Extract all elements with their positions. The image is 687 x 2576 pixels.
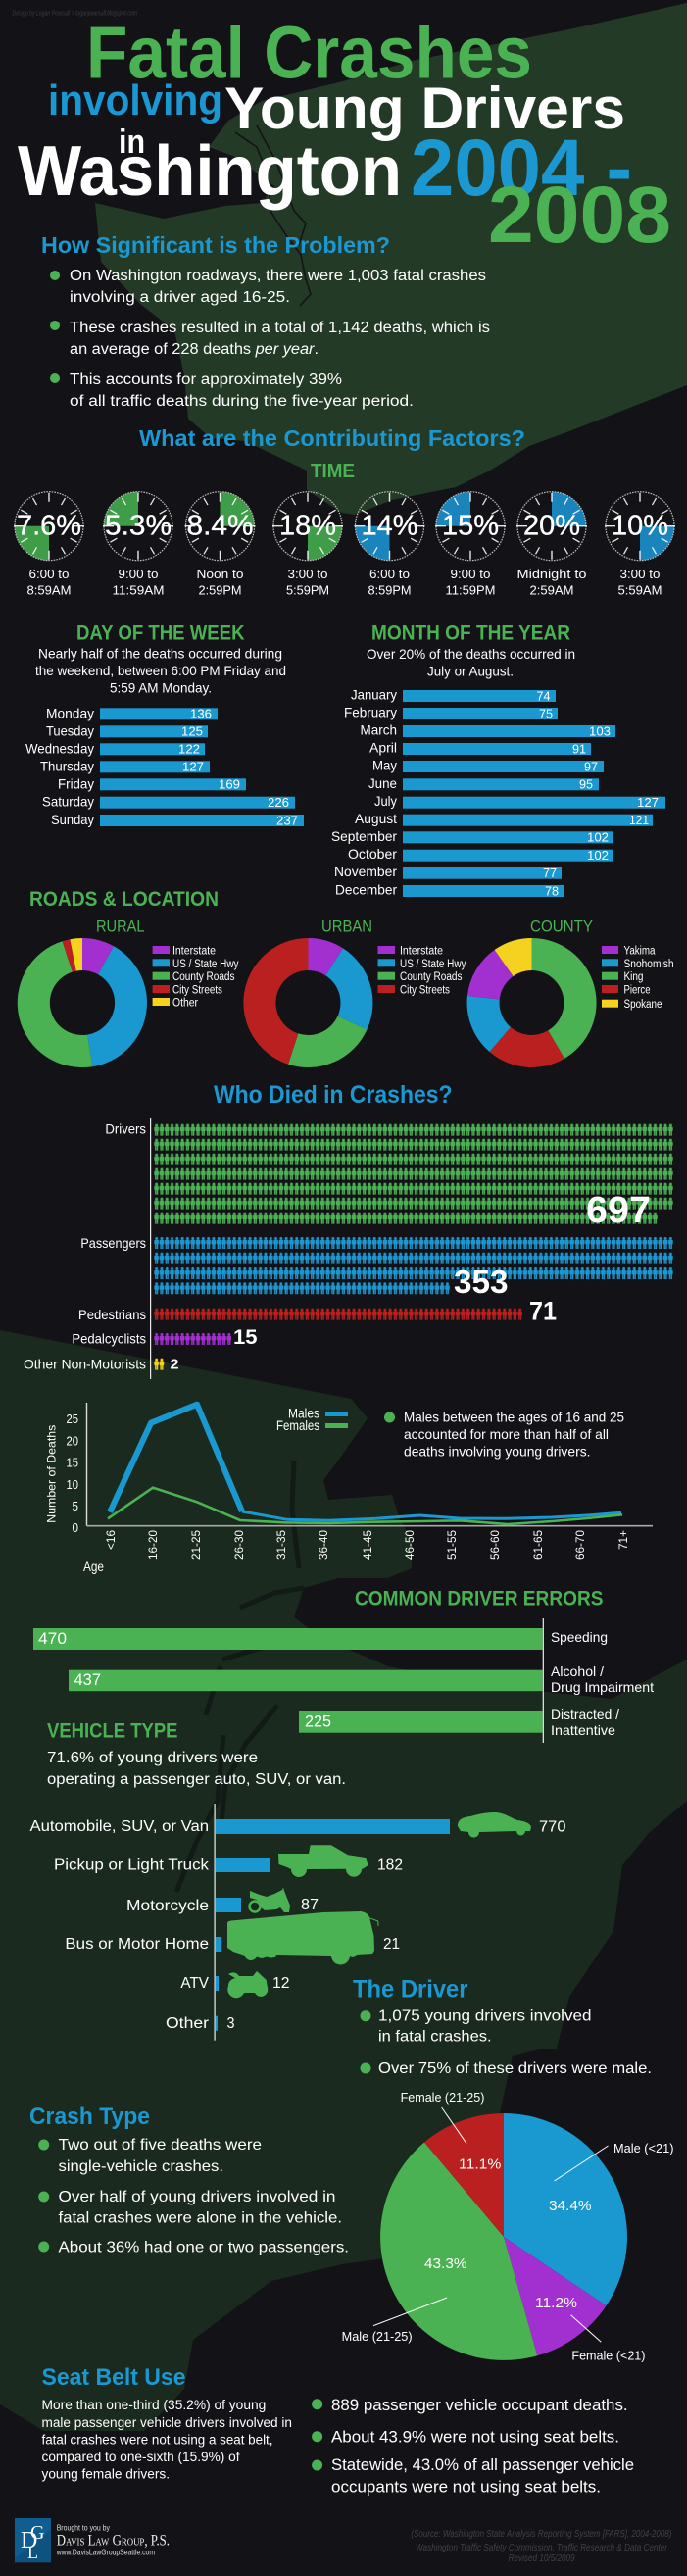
- bar chart: vehicle type: Pickup or Light Truck: [54, 1858, 209, 1874]
- bar chart: month: 77: [543, 867, 557, 880]
- line chart: deaths by age: 71+: [616, 1530, 630, 1550]
- bar chart: month: December: [335, 882, 397, 898]
- clock labels: 2:59AM: [529, 583, 574, 598]
- clock labels: 3:00 to: [619, 567, 661, 581]
- clock 6pm: [355, 492, 425, 561]
- legend: county: Spokane: [623, 999, 662, 1011]
- clock 3am: 10%: [612, 511, 668, 542]
- bullet list: significance: On Washington roadways, there were 1,003 fatal crashes: [70, 268, 486, 284]
- bar chart: driver errors: Alcohol /: [551, 1663, 604, 1679]
- source note: Revised 10/5/2009: [509, 2552, 575, 2564]
- bar chart: month: 95: [579, 778, 593, 792]
- icon: bus: [227, 1911, 378, 1964]
- line chart: deaths by age: [45, 1403, 653, 1574]
- clock labels: 11:59PM: [445, 583, 496, 598]
- line chart: deaths by age: 66-70: [573, 1530, 587, 1560]
- bar chart: vehicle type: 21: [383, 1936, 400, 1953]
- text: vehicle intro: 71.6% of young drivers were: [47, 1750, 258, 1766]
- pie chart: drivers by age and sex: 11.1%: [459, 2157, 502, 2173]
- line chart: deaths by age: Age: [83, 1559, 104, 1574]
- clock 3am: [605, 492, 675, 561]
- pedestrians row: 71: [529, 1297, 557, 1326]
- clock labels: 5:59PM: [286, 583, 329, 598]
- legend: rural: Other: [172, 998, 198, 1010]
- panel: day of the week: Nearly half of the deaths occurred during: [38, 646, 282, 662]
- panel: crash type: single-vehicle crashes.: [59, 2158, 223, 2175]
- heading: vehicle type: VEHICLE TYPE: [47, 1720, 178, 1743]
- line chart: deaths by age: 0: [73, 1521, 78, 1535]
- text: vehicle intro: [47, 1750, 346, 1788]
- bar chart: month: July: [374, 793, 397, 809]
- legend: rural: US / State Hwy: [172, 959, 239, 970]
- clock labels: 5:59AM: [617, 583, 662, 598]
- bar chart: month: 97: [584, 760, 598, 773]
- pie chart: drivers by age and sex: [342, 2091, 674, 2362]
- pictogram chart: who died: [24, 1118, 673, 1379]
- bar chart: month: August: [355, 811, 397, 826]
- bar chart: vehicle type: 87: [301, 1897, 319, 1913]
- bullets: seat belts: Statewide, 43.0% of all passenger vehicle: [331, 2455, 634, 2474]
- clock labels: 6:00 to: [29, 567, 69, 581]
- other non-motorists row: [154, 1357, 178, 1373]
- panel: day of the week: DAY OF THE WEEK: [76, 622, 245, 645]
- line chart: deaths by age: 61-65: [531, 1530, 545, 1560]
- line chart: deaths by age: 16-20: [146, 1530, 160, 1560]
- callout: males 16-25: Males between the ages of 16 and 25: [404, 1410, 624, 1425]
- line chart: deaths by age: <16: [104, 1530, 118, 1550]
- bar chart: vehicle type: ATV: [180, 1975, 210, 1992]
- title: in: [119, 124, 145, 161]
- bar chart: month: November: [334, 864, 397, 879]
- line chart: deaths by age: 26-30: [232, 1530, 246, 1560]
- panel: crash type: fatal crashes were alone in the vehicle.: [59, 2210, 342, 2227]
- clock labels: Midnight to: [517, 567, 586, 581]
- panel: the driver: in fatal crashes.: [378, 2029, 492, 2046]
- panel: county: [467, 917, 674, 1067]
- clock labels: 9:00 to: [118, 567, 159, 581]
- bar chart: month: May: [372, 757, 397, 772]
- map of Washington, top: [95, 3, 687, 515]
- chart legend: Males: [288, 1406, 319, 1421]
- callout: males 16-25: [384, 1410, 624, 1460]
- bar chart: vehicle type: Motorcycle: [126, 1898, 209, 1914]
- title: [18, 12, 671, 260]
- passengers row: 353: [454, 1263, 508, 1300]
- other non-motorists row: 2: [171, 1357, 178, 1373]
- map of Washington, lower: [0, 1330, 687, 2431]
- clock midnight: 20%: [523, 511, 580, 542]
- bar chart: vehicle type: 182: [377, 1858, 403, 1874]
- panel: seat belt use: male passenger vehicle drivers involved in: [41, 2415, 292, 2430]
- bar chart: month: June: [368, 775, 397, 791]
- pedestrians row: [154, 1297, 557, 1326]
- heading: contributing factors: What are the Contributing Factors?: [139, 425, 525, 451]
- title: Fatal Crashes: [86, 12, 532, 94]
- legend: urban: US / State Hwy: [400, 959, 466, 970]
- clock labels: Noon to: [196, 567, 243, 581]
- bar chart: driver errors: 225: [305, 1712, 331, 1731]
- panel: day of the week: 5:59 AM Monday.: [110, 680, 212, 696]
- line chart: deaths by age: 31-35: [274, 1530, 288, 1560]
- heading: who died: Who Died in Crashes?: [214, 1081, 453, 1109]
- clock labels: 6:00 to: [369, 567, 410, 581]
- bar chart: month: 78: [545, 884, 559, 898]
- bar chart: driver errors: Distracted /: [551, 1707, 619, 1722]
- panel: month of the year: Over 20% of the deaths occurred in: [367, 646, 575, 662]
- bullets: seat belts: occupants were not using seat belts.: [331, 2477, 601, 2496]
- legend: urban: [378, 945, 466, 996]
- pie chart: drivers by age and sex: Male (<21): [613, 2142, 674, 2155]
- pie chart: drivers by age and sex: Female (21-25): [401, 2091, 484, 2105]
- title: Young Drivers: [224, 75, 625, 141]
- panel: county: COUNTY: [530, 917, 593, 936]
- line chart: deaths by age: 20: [67, 1435, 78, 1449]
- source note: [411, 2528, 671, 2564]
- pictogram chart: who died: Pedestrians: [78, 1307, 146, 1322]
- clock labels: 8:59PM: [368, 583, 412, 598]
- chart legend: Females: [276, 1417, 319, 1433]
- line chart: deaths by age: 36-40: [317, 1530, 330, 1560]
- pie chart: drivers by age and sex: Male (21-25): [342, 2330, 413, 2344]
- bar chart: month: 74: [537, 689, 551, 703]
- legend: county: Pierce: [623, 984, 651, 996]
- panel: the driver: The Driver: [353, 1976, 468, 2004]
- bar chart: month: 121: [629, 814, 649, 827]
- heading: how significant: How Significant is the Problem?: [41, 232, 390, 258]
- bar chart: vehicle type: Automobile, SUV, or Van: [29, 1818, 209, 1835]
- bar chart: day of week: 122: [178, 743, 200, 757]
- clock 6am: [14, 492, 84, 561]
- legend: rural: [153, 945, 239, 1010]
- heading: common driver errors: COMMON DRIVER ERRORS: [355, 1587, 604, 1610]
- bar chart: month: April: [369, 739, 397, 755]
- clock labels: 9:00 to: [451, 567, 490, 581]
- males line: [110, 1405, 242, 1512]
- bar chart: month: February: [344, 704, 397, 719]
- bar chart: vehicle type: Bus or Motor Home: [65, 1936, 209, 1953]
- bullet list: significance: of all traffic deaths during the five-year period.: [70, 393, 414, 410]
- clock labels: [27, 567, 662, 598]
- callout: males 16-25: accounted for more than half of all: [404, 1426, 609, 1442]
- bar chart: day of week: Saturday: [42, 794, 94, 810]
- clock labels: 3:00 to: [288, 567, 327, 581]
- bar chart: vehicle type: 12: [272, 1975, 290, 1992]
- bar chart: day of week: 127: [182, 761, 204, 774]
- clock 6pm: 14%: [361, 511, 417, 542]
- panel: crash type: About 36% had one or two passengers.: [59, 2240, 349, 2256]
- line chart: deaths by age: 21-25: [189, 1530, 203, 1560]
- bar chart: month: 127: [637, 796, 659, 810]
- line chart: deaths by age: 10: [67, 1478, 78, 1492]
- title: 2004 -: [411, 124, 632, 213]
- bullets: seat belts: About 43.9% were not using seat belts.: [331, 2428, 619, 2447]
- clock 3pm: 18%: [279, 511, 336, 542]
- pictogram chart: who died: Drivers: [105, 1121, 146, 1137]
- icon: pickup truck: [278, 1845, 368, 1877]
- title: involving: [48, 76, 222, 124]
- donut: urban: [243, 938, 372, 1067]
- pedalcyclists row: [154, 1326, 258, 1349]
- heading: time: TIME: [311, 461, 355, 482]
- legend: county: Snohomish: [623, 959, 674, 970]
- clock 9am: 5.3%: [105, 511, 172, 542]
- bar chart: day of week: 237: [276, 814, 298, 827]
- line chart: deaths by age: 25: [67, 1412, 78, 1426]
- pie chart: drivers by age and sex: 34.4%: [549, 2199, 592, 2214]
- clock row: [14, 492, 675, 561]
- legend: rural: County Roads: [172, 971, 235, 983]
- pie chart: drivers by age and sex: 43.3%: [424, 2256, 467, 2272]
- panel: the driver: 1,075 young drivers involved: [378, 2008, 592, 2025]
- clock 9am: [103, 492, 173, 561]
- panel: urban: URBAN: [321, 917, 372, 936]
- line chart: deaths by age: 51-55: [445, 1530, 459, 1560]
- bar chart: day of week: 169: [219, 778, 240, 792]
- drivers row: [154, 1124, 673, 1231]
- bar chart: day of week: Thursday: [40, 758, 94, 773]
- bar chart: day of week: Sunday: [51, 812, 94, 827]
- credit line: Design by Logan Pearsall > loganpearsall.blogspot.com: [12, 9, 137, 18]
- bar chart: day of week: 125: [181, 725, 203, 739]
- clock labels: 8:59AM: [27, 583, 71, 598]
- bar chart: vehicle type: 770: [539, 1818, 566, 1835]
- icon: car: [458, 1812, 531, 1838]
- bar chart: day of week: Friday: [58, 775, 94, 791]
- panel: rural: [18, 917, 239, 1067]
- icon: motorcycle: [249, 1888, 290, 1912]
- title: 2008: [488, 171, 671, 260]
- pedalcyclists row: 15: [233, 1326, 258, 1349]
- text: vehicle intro: operating a passenger auto, SUV, or van.: [47, 1771, 346, 1788]
- legend: urban: Interstate: [400, 945, 443, 957]
- panel: urban: [243, 917, 466, 1067]
- panel: seat belt use: fatal crashes were not using a seat belt,: [41, 2433, 272, 2448]
- legend: urban: City Streets: [400, 984, 450, 996]
- bar chart: vehicle type: 3: [227, 2015, 235, 2032]
- pictogram chart: who died: Passengers: [80, 1235, 146, 1251]
- panel: day of the week: the weekend, between 6:00 PM Friday and: [35, 663, 286, 678]
- bar chart: month: January: [351, 686, 397, 702]
- panel: crash type: [29, 2104, 349, 2256]
- pie chart: drivers by age and sex: Female (<21): [571, 2349, 645, 2362]
- panel: seat belt use: young female drivers.: [41, 2466, 170, 2481]
- bar chart: month: 75: [539, 707, 553, 720]
- bullet list: significance: These crashes resulted in a total of 1,142 deaths, which is: [70, 320, 490, 336]
- chart legend: [276, 1406, 348, 1433]
- logo: Davis Law Group: Brought to you by: [57, 2523, 111, 2533]
- legend: urban: County Roads: [400, 971, 463, 983]
- clock noon: 8.4%: [186, 511, 253, 542]
- logo: Davis Law Group: G: [30, 2522, 44, 2544]
- bullet list: significance: an average of 228 deaths per year.: [70, 341, 319, 358]
- line chart: deaths by age: Number of Deaths: [45, 1425, 59, 1523]
- bullets: seat belts: [312, 2396, 634, 2496]
- clock labels: 11:59AM: [112, 583, 165, 598]
- bar chart: month: September: [331, 828, 397, 844]
- donut: rural: [18, 938, 147, 1067]
- bullet list: significance: involving a driver aged 16-25.: [70, 289, 290, 306]
- drivers row: 697: [586, 1190, 651, 1231]
- clock 9pm: 15%: [442, 511, 499, 542]
- bar chart: driver errors: 470: [38, 1629, 67, 1648]
- bar chart: vehicle type: [29, 1804, 566, 2041]
- clock 3pm: [272, 492, 343, 561]
- legend: county: King: [623, 971, 643, 983]
- panel: crash type: Crash Type: [29, 2104, 150, 2130]
- panel: the driver: Over 75% of these drivers were male.: [378, 2060, 652, 2077]
- heading: roads and location: ROADS & LOCATION: [29, 888, 219, 911]
- bar chart: day of week: Monday: [46, 705, 94, 720]
- line chart: deaths by age: 46-50: [403, 1530, 417, 1560]
- bar chart: driver errors: 437: [74, 1670, 101, 1689]
- line chart: deaths by age: 15: [67, 1457, 78, 1470]
- panel: month of the year: [331, 622, 665, 898]
- bullet list: significance: This accounts for approximately 39%: [70, 372, 342, 388]
- logo: Davis Law Group: L: [27, 2543, 38, 2562]
- bar chart: month: March: [361, 721, 397, 737]
- pictogram chart: who died: Pedalcyclists: [72, 1331, 146, 1347]
- bar chart: driver errors: [33, 1618, 654, 1743]
- bar chart: driver errors: Drug Impairment: [551, 1679, 654, 1695]
- panel: seat belt use: Seat Belt Use: [41, 2364, 186, 2391]
- logo: Davis Law Group: D: [21, 2528, 37, 2553]
- pictogram chart: who died: Other Non-Motorists: [24, 1357, 146, 1372]
- bar chart: month: 91: [572, 742, 586, 756]
- bar chart: day of week: Tuesday: [46, 722, 94, 738]
- callout: males 16-25: deaths involving young drivers.: [404, 1444, 590, 1460]
- panel: month of the year: July or August.: [427, 664, 514, 679]
- bar chart: month: October: [348, 846, 397, 862]
- clock labels: 2:59PM: [198, 583, 241, 598]
- logo: Davis Law Group: www.DavisLawGroupSeattle.com: [56, 2549, 155, 2557]
- panel: seat belt use: [41, 2364, 634, 2496]
- legend: county: [602, 945, 674, 1011]
- bar chart: driver errors: Inattentive: [551, 1722, 615, 1738]
- bar chart: month: 103: [589, 724, 611, 738]
- legend: rural: Interstate: [172, 945, 216, 957]
- line chart: deaths by age: 5: [73, 1500, 78, 1513]
- bullet list: significance: [50, 268, 490, 410]
- pie chart: drivers by age and sex: 11.2%: [535, 2296, 577, 2311]
- panel: crash type: Two out of five deaths were: [59, 2137, 262, 2154]
- title: Washington: [18, 132, 402, 211]
- bar chart: day of week: Wednesday: [25, 740, 94, 756]
- females line: [108, 1488, 622, 1524]
- bar chart: month: 102: [587, 849, 609, 863]
- panel: crash type: Over half of young drivers involved in: [59, 2189, 335, 2205]
- clock midnight: [516, 492, 587, 561]
- bar chart: day of week: 136: [190, 708, 212, 721]
- panel: seat belt use: compared to one-sixth (15.9%) of: [41, 2450, 240, 2464]
- panel: day of the week: [25, 622, 304, 827]
- clock noon: [184, 492, 255, 561]
- donut: county: [467, 938, 597, 1067]
- line chart: deaths by age: 56-60: [488, 1530, 502, 1560]
- logo: Davis Law Group: [15, 2518, 170, 2562]
- bar chart: day of week: [25, 705, 304, 827]
- line chart: deaths by age: 41-45: [361, 1530, 374, 1560]
- bar chart: month: [331, 686, 665, 898]
- panel: month of the year: MONTH OF THE YEAR: [371, 622, 570, 645]
- bar chart: day of week: 226: [268, 796, 289, 810]
- panel: the driver: [353, 1976, 652, 2077]
- clock 9pm: [435, 492, 506, 561]
- panel: seat belt use: More than one-third (35.2%) of young: [41, 2398, 266, 2412]
- legend: rural: City Streets: [172, 984, 222, 996]
- logo: Davis Law Group: Davis Law Group, P.S.: [57, 2533, 170, 2550]
- passengers row: [154, 1237, 673, 1300]
- icon: ATV: [227, 1971, 268, 1998]
- bullets: seat belts: 889 passenger vehicle occupant deaths.: [331, 2396, 628, 2414]
- panel: rural: RURAL: [96, 917, 145, 936]
- bar chart: vehicle type: Other: [166, 2015, 209, 2032]
- clock 6am: 7.6%: [17, 511, 81, 542]
- bar chart: driver errors: Speeding: [551, 1629, 608, 1645]
- legend: county: Yakima: [623, 945, 656, 957]
- bar chart: month: 102: [587, 831, 609, 845]
